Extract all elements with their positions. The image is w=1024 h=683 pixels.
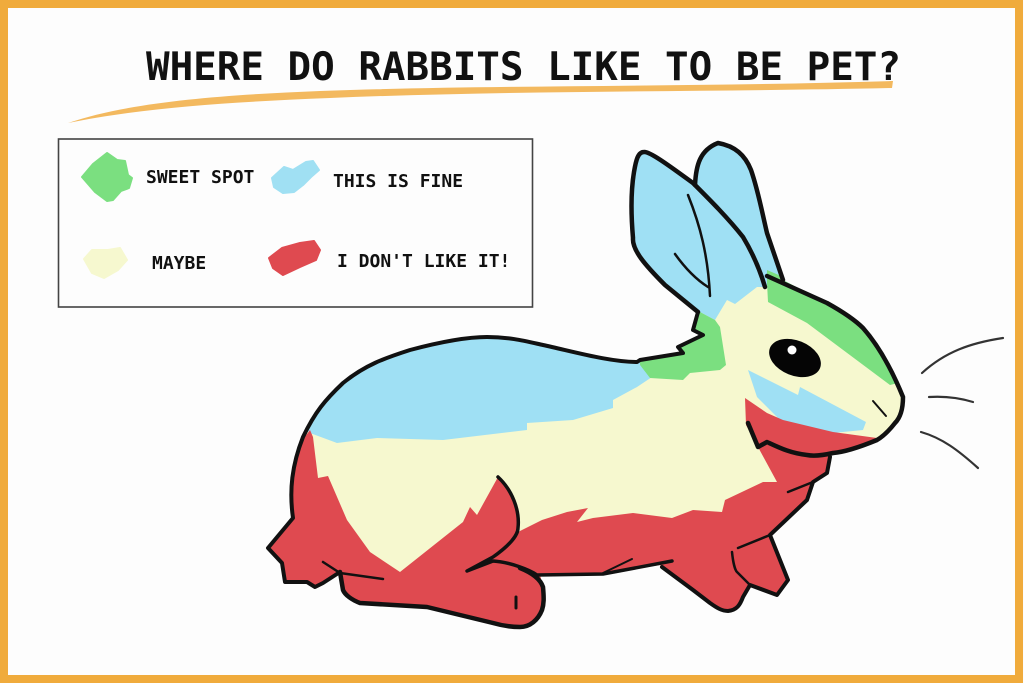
outline: front ear <box>632 152 765 312</box>
zone: chest and belly don't like <box>270 430 828 625</box>
zone: maybe base <box>306 284 901 578</box>
zone: neck sweet spot <box>640 310 726 380</box>
title underline swoosh <box>68 81 893 123</box>
outline: chest and legs <box>662 457 830 611</box>
outline: tail crease <box>323 562 383 579</box>
nose <box>873 401 886 416</box>
rabbit colour zones <box>270 146 901 625</box>
legend panel <box>58 139 532 307</box>
title: WHERE DO RABBITS LIKE TO BE PET? <box>146 45 901 90</box>
outline: inner ear <box>675 195 710 296</box>
label: sweet spot: SWEET SPOT <box>146 167 255 188</box>
outline: hind foot <box>340 568 544 627</box>
outline: head <box>748 276 903 456</box>
outline: leg creases <box>732 482 813 585</box>
outline: toe <box>514 597 518 608</box>
rabbit outline <box>268 143 903 627</box>
outline: back ear <box>695 143 783 280</box>
label: i don't like it: I DON'T LIKE IT! <box>337 251 510 272</box>
outline: belly <box>467 477 672 575</box>
swatch: sweet spot <box>82 153 132 201</box>
label: maybe: MAYBE <box>152 253 206 274</box>
swatch: i don't like it <box>269 241 320 275</box>
eye <box>763 332 827 384</box>
zone: head sweet spot <box>767 270 895 385</box>
outline: back and tail <box>268 312 703 587</box>
whiskers <box>921 338 1003 468</box>
swatch: maybe <box>84 248 127 278</box>
zone: chin don't like <box>745 398 876 450</box>
label: this is fine: THIS IS FINE <box>333 171 463 192</box>
outline: belly fur <box>603 559 632 573</box>
rabbit illustration <box>255 130 1003 640</box>
zone: cheek this is fine <box>748 370 866 433</box>
zone: ears this is fine <box>634 146 790 320</box>
zone: back this is fine <box>308 339 650 443</box>
swatch: this is fine <box>272 161 319 193</box>
